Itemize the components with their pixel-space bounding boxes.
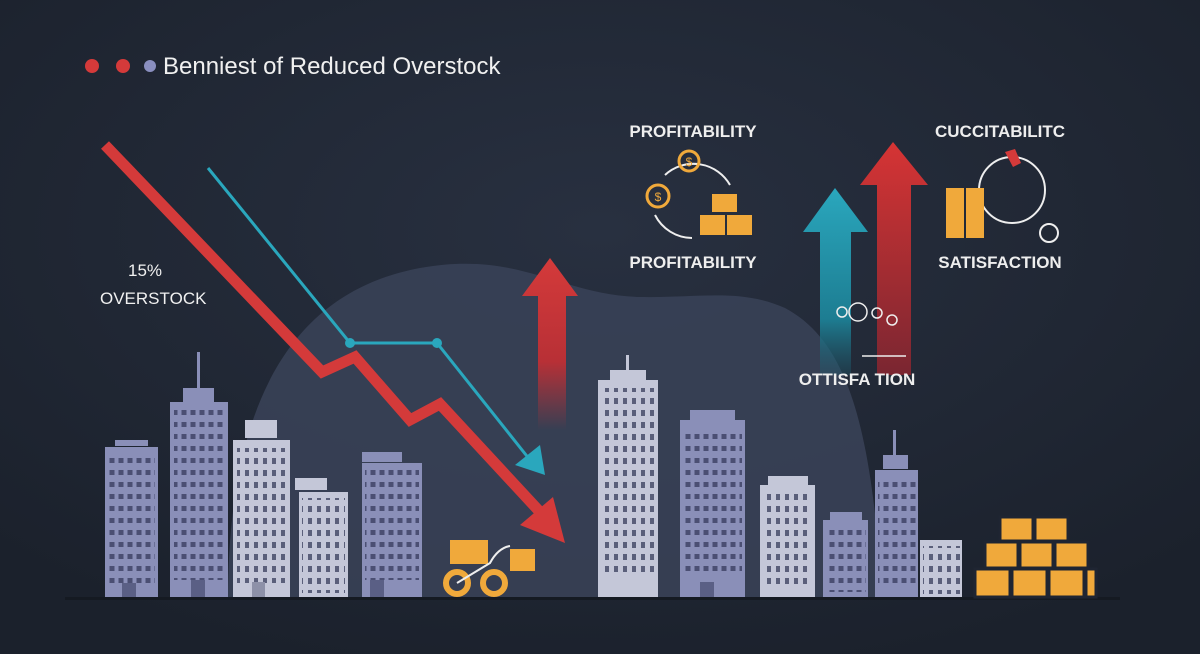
panel: satisfaction: SATISFACTION bbox=[938, 253, 1062, 272]
buildings bbox=[105, 352, 962, 598]
title: Benniest of Reduced Overstock bbox=[163, 53, 502, 80]
background hill bbox=[228, 264, 882, 600]
panel: profitability: PROFITABILITY bbox=[629, 253, 757, 272]
arrow: teal downtrend bbox=[208, 168, 545, 475]
icon: magnifier cluster bbox=[837, 303, 906, 356]
arrow: red up bbox=[860, 142, 928, 375]
label: 15% overstock: OVERSTOCK bbox=[100, 289, 207, 308]
panel: profitability: PROFITABILITY bbox=[629, 122, 757, 141]
arrow: red downtrend bbox=[105, 145, 565, 543]
panel: profitability: $ bbox=[655, 190, 662, 204]
icon: box stack bbox=[975, 517, 1096, 597]
label: 15% overstock bbox=[100, 261, 207, 308]
label: 15% overstock: 15% bbox=[128, 261, 162, 280]
panel: profitability: $ bbox=[686, 155, 693, 169]
panel: profitability bbox=[629, 122, 757, 272]
icon: delivery bike bbox=[446, 540, 535, 594]
arrow: middle red up bbox=[522, 258, 578, 430]
panel: satisfaction bbox=[935, 122, 1065, 272]
arrow: teal up bbox=[803, 188, 868, 375]
panel: satisfaction: CUCCITABILITC bbox=[935, 122, 1065, 141]
label: ottisfaction: OTTISFA TION bbox=[799, 370, 915, 389]
